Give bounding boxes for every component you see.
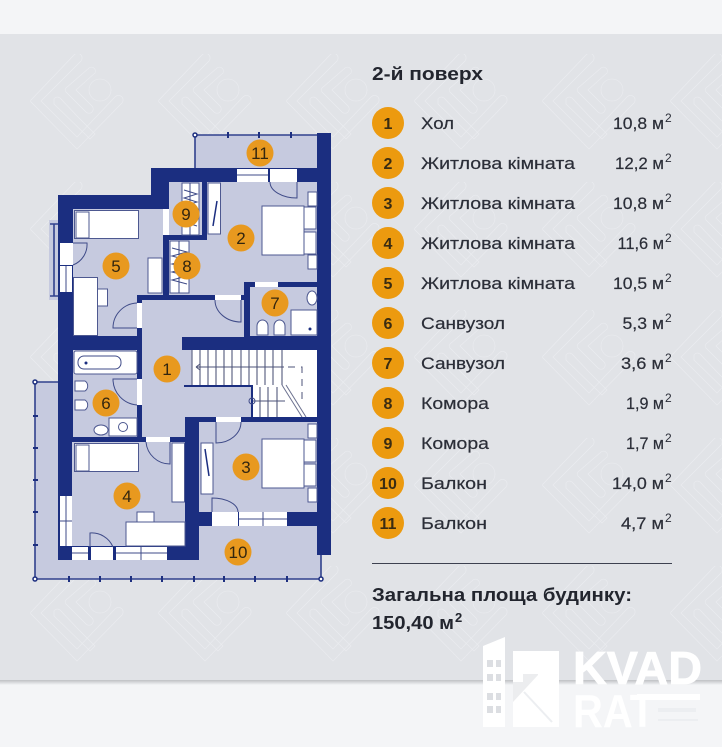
row 3 bbox=[372, 187, 672, 219]
balcony 10 floor bbox=[35, 382, 321, 579]
row 7: 2 bbox=[665, 351, 672, 365]
row 7: Санвузол bbox=[421, 355, 505, 373]
plan badge 8 bbox=[174, 252, 200, 280]
row 6 bbox=[372, 307, 672, 339]
row 6: 2 bbox=[665, 311, 672, 325]
total area bbox=[372, 584, 632, 633]
row 8 bbox=[372, 387, 672, 419]
row 2: Житлова кімната bbox=[421, 155, 576, 173]
logo wordmark: KVAD bbox=[573, 642, 702, 694]
row 3: 10,8 м bbox=[613, 195, 664, 213]
row 9: 1,7 м bbox=[626, 435, 664, 453]
row 10: Балкон bbox=[421, 475, 487, 493]
plan badge 11: 11 bbox=[251, 144, 269, 163]
row 1: 1 bbox=[384, 116, 393, 133]
plan badge 7: 7 bbox=[270, 294, 280, 313]
row 9 bbox=[372, 427, 672, 459]
row 4: Житлова кімната bbox=[421, 235, 576, 253]
row 6: 5,3 м bbox=[622, 315, 664, 333]
plan badge 11 bbox=[246, 140, 274, 166]
logo K square bbox=[513, 651, 559, 727]
stairs bbox=[184, 350, 317, 417]
room list bbox=[372, 107, 672, 539]
row 7 bbox=[372, 347, 672, 379]
row 5: 5 bbox=[384, 276, 393, 293]
row 4: 4 bbox=[384, 236, 393, 253]
total area: 150,40 м bbox=[372, 612, 454, 633]
row 11: Балкон bbox=[421, 515, 487, 533]
walls bbox=[58, 133, 331, 560]
row 3: Житлова кімната bbox=[421, 195, 576, 213]
plan badge 7 bbox=[262, 290, 288, 316]
plan badge 6: 6 bbox=[101, 394, 111, 413]
row 8: 2 bbox=[665, 391, 672, 405]
furniture: room 6 bathroom bbox=[74, 351, 137, 436]
row 11: 11 bbox=[380, 516, 397, 533]
balcony 11 floor bbox=[195, 135, 317, 169]
plan badge 4 bbox=[114, 482, 140, 510]
row 9: Комора bbox=[421, 435, 490, 453]
row 7: 7 bbox=[384, 356, 393, 373]
total area: Загальна площа будинку: bbox=[372, 584, 632, 605]
row 5: 2 bbox=[665, 271, 672, 285]
row 2: 12,2 м bbox=[615, 155, 664, 173]
plan badge 5: 5 bbox=[111, 257, 121, 276]
row 5 bbox=[372, 267, 672, 299]
row 10: 2 bbox=[665, 471, 672, 485]
row 2 bbox=[372, 147, 672, 179]
row 8: 1,9 м bbox=[626, 395, 664, 413]
row 4 bbox=[372, 227, 672, 259]
plan badge 1 bbox=[154, 356, 180, 382]
row 6: Санвузол bbox=[421, 315, 505, 333]
row 3: 3 bbox=[384, 196, 393, 213]
row 11 bbox=[372, 507, 672, 539]
floor plan bbox=[33, 132, 331, 582]
row 9: 9 bbox=[384, 436, 393, 453]
row 2: 2 bbox=[665, 151, 672, 165]
doors and windows bbox=[60, 169, 297, 560]
heading: 2-й поверх bbox=[372, 64, 483, 84]
logo building bbox=[483, 637, 505, 727]
row 4: 2 bbox=[665, 231, 672, 245]
plan badge 1: 1 bbox=[162, 360, 172, 379]
row 1: Хол bbox=[421, 115, 454, 133]
plan badge 5 bbox=[102, 252, 130, 280]
row 1: 2 bbox=[665, 111, 672, 125]
row 8: 8 bbox=[384, 396, 393, 413]
row 3: 2 bbox=[665, 191, 672, 205]
plan badge 9 bbox=[172, 200, 200, 228]
row 11: 4,7 м bbox=[621, 515, 664, 533]
plan badge 10 bbox=[224, 538, 252, 566]
left window ledge bbox=[49, 220, 59, 300]
room interiors bbox=[72, 182, 317, 546]
row 9: 2 bbox=[665, 431, 672, 445]
row 11: 2 bbox=[665, 511, 672, 525]
furniture: room 2 bbox=[208, 183, 317, 269]
plan badge 3: 3 bbox=[241, 458, 251, 477]
row 10: 10 bbox=[379, 476, 397, 493]
row 6: 6 bbox=[384, 316, 393, 333]
row 10 bbox=[372, 467, 672, 499]
row 1: 10,8 м bbox=[613, 115, 664, 133]
plan badge 10: 10 bbox=[229, 543, 247, 562]
logo watermark bbox=[483, 637, 702, 737]
logo wordmark bbox=[573, 642, 702, 737]
wardrobes in storerooms 8 and 9 bbox=[170, 183, 199, 293]
plan badge 3 bbox=[232, 454, 260, 480]
row 5: Житлова кімната bbox=[421, 275, 576, 293]
plan badge 2: 2 bbox=[236, 229, 246, 248]
row 2: 2 bbox=[384, 156, 393, 173]
furniture: room 7 bathroom bbox=[257, 291, 317, 335]
row 7: 3,6 м bbox=[621, 355, 664, 373]
balcony railings bbox=[33, 132, 323, 582]
furniture: room 5 bbox=[74, 210, 162, 336]
row 1 bbox=[372, 107, 672, 139]
row 10: 14,0 м bbox=[612, 475, 664, 493]
plan badge 2 bbox=[228, 224, 254, 252]
logo wordmark: RAT bbox=[573, 685, 655, 737]
divider bbox=[372, 563, 672, 564]
plan badge 4: 4 bbox=[122, 487, 132, 506]
furniture: room 3 bbox=[201, 424, 317, 502]
plan badge 9: 9 bbox=[181, 205, 191, 224]
row 4: 11,6 м bbox=[618, 235, 664, 253]
furniture: room 4 bbox=[74, 443, 185, 546]
plan badge 8: 8 bbox=[182, 257, 192, 276]
plan badge 6 bbox=[92, 390, 120, 416]
total area: 2 bbox=[455, 610, 462, 625]
row 5: 10,5 м bbox=[613, 275, 664, 293]
row 8: Комора bbox=[421, 395, 490, 413]
